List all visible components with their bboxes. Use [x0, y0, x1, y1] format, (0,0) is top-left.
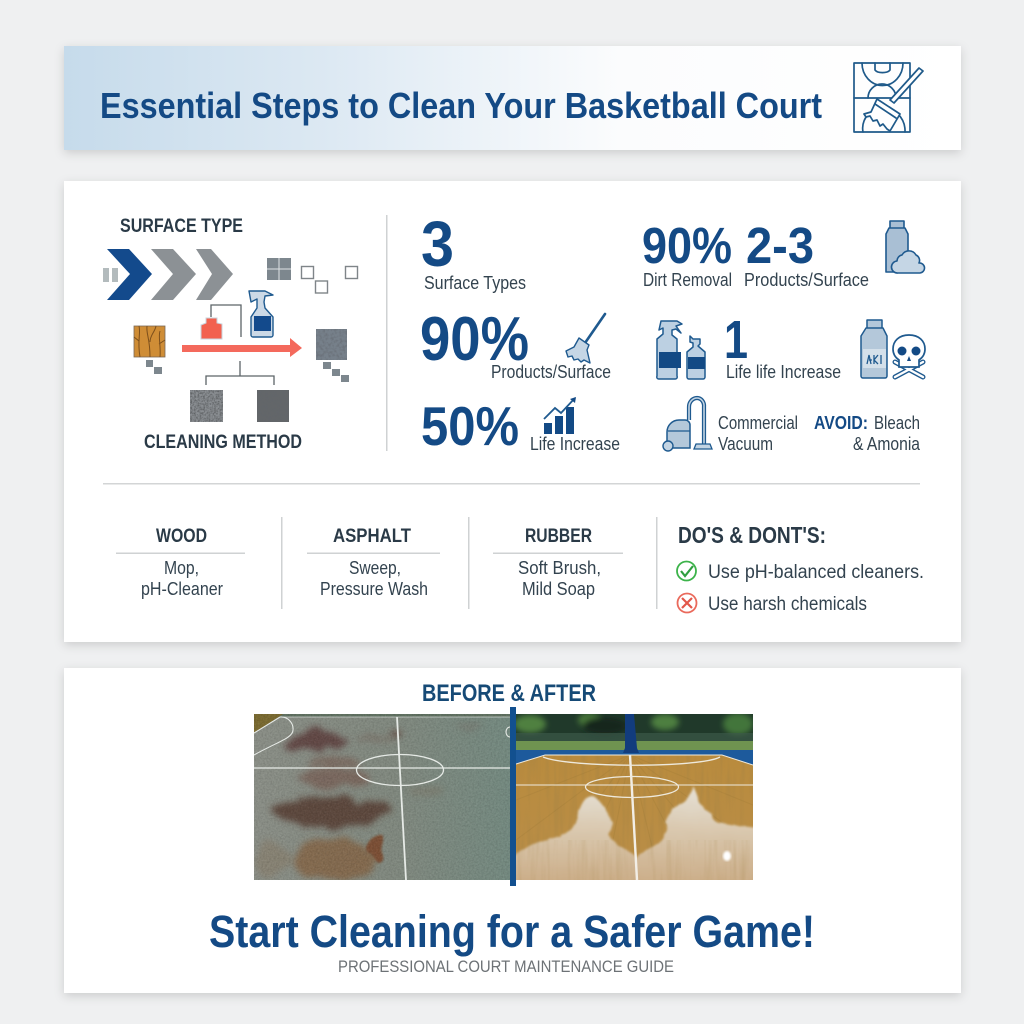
stat: 3 surface types	[421, 208, 526, 293]
column: wood: Mop,	[164, 558, 199, 578]
text: avoid bleach and ammonia: Bleach	[874, 413, 920, 433]
text: avoid bleach and ammonia: AVOID:	[814, 413, 868, 433]
panel: header banner	[64, 46, 961, 150]
icon: green check	[677, 562, 696, 580]
column: rubber: Mild Soap	[522, 579, 595, 599]
text: avoid bleach and ammonia: & Amonia	[853, 434, 921, 454]
column: asphalt: Sweep,	[349, 558, 401, 578]
stat: 3 surface types: Surface Types	[424, 273, 526, 293]
stat: 90% products per surface	[420, 305, 611, 382]
text: commercial vacuum	[718, 413, 798, 454]
panel: main information	[64, 181, 961, 642]
stat: 1 life increase	[724, 310, 841, 382]
stat: 90% products per surface: Products/Surface	[491, 362, 611, 382]
column: wood	[116, 526, 245, 599]
stat: 50% life increase: Life Increase	[530, 434, 620, 454]
text: commercial vacuum: Vacuum	[718, 434, 773, 454]
list: do's and don'ts: Use harsh chemicals	[708, 594, 867, 615]
icon: spray bottle	[249, 291, 273, 337]
icon: bottle with cloud	[886, 221, 925, 273]
stat: 3 surface types: 3	[421, 208, 454, 280]
texture: asphalt	[316, 329, 347, 360]
blue divider	[510, 707, 516, 886]
icon: broom	[566, 314, 605, 363]
tile squares	[267, 258, 358, 293]
small squares under asphalt	[323, 362, 349, 382]
stat: 90% products per surface: 90%	[420, 305, 529, 374]
stat: 2-3 products per surface	[744, 217, 869, 290]
red arrow	[182, 338, 302, 357]
heading: cleaning method: CLEANING METHOD	[144, 432, 302, 453]
icon: court and broom	[854, 63, 923, 132]
stat: 90% dirt removal: Dirt Removal	[643, 270, 732, 290]
stat: 1 life increase: 1	[724, 310, 748, 370]
text: commercial vacuum: Commercial	[718, 413, 798, 433]
small grey bars	[103, 268, 118, 282]
column: asphalt: ASPHALT	[333, 526, 411, 547]
stat: 2-3 products per surface: 2-3	[746, 217, 814, 274]
column: rubber: RUBBER	[525, 526, 592, 547]
photo: clean court after	[516, 714, 753, 880]
panel: before and after	[64, 668, 961, 993]
icon: two spray bottles	[657, 321, 705, 379]
column: wood: WOOD	[156, 526, 207, 547]
column: asphalt: Pressure Wash	[320, 579, 428, 599]
small squares under wood	[146, 360, 162, 374]
stat: 90% dirt removal: 90%	[642, 217, 732, 274]
title: Essential Steps to Clean Your Basketball Court	[100, 85, 822, 126]
list: do's and don'ts: Use pH-balanced cleaners.	[708, 562, 924, 583]
icon: red cleaner bottle	[201, 318, 222, 339]
heading: surface type: SURFACE TYPE	[120, 216, 243, 237]
text: avoid bleach and ammonia	[814, 413, 921, 454]
subtitle: PROFESSIONAL COURT MAINTENANCE GUIDE	[338, 957, 674, 976]
heading: before and after: BEFORE & AFTER	[422, 680, 596, 707]
column: wood: pH-Cleaner	[141, 579, 223, 599]
column: rubber: Soft Brush,	[518, 558, 601, 578]
icon: commercial vacuum	[663, 398, 712, 451]
stat: 50% life increase: 50%	[421, 395, 519, 457]
icon: growth chart	[544, 397, 576, 434]
column: asphalt	[307, 526, 440, 599]
stat: 2-3 products per surface: Products/Surface	[744, 270, 869, 290]
texture: wood	[134, 326, 165, 357]
chevron arrows	[107, 249, 233, 300]
icon: red cross	[678, 594, 696, 612]
stat: 50% life increase	[421, 395, 620, 457]
texture: dark rubber	[257, 390, 289, 422]
list: do's and don'ts: DO'S & DONT'S:	[678, 522, 826, 548]
photo: dirty court before	[254, 714, 510, 880]
list: do's and don'ts	[677, 522, 924, 615]
column: rubber	[493, 526, 623, 599]
call to action: Start Cleaning for a Safer Game!	[209, 906, 815, 957]
icon: toxic bottle and skull	[861, 320, 925, 378]
diagram: surface type to cleaning method	[103, 216, 358, 453]
stat: 1 life increase: Life life Increase	[726, 362, 841, 382]
connector lines	[206, 305, 274, 385]
texture: grey granular	[190, 390, 223, 422]
